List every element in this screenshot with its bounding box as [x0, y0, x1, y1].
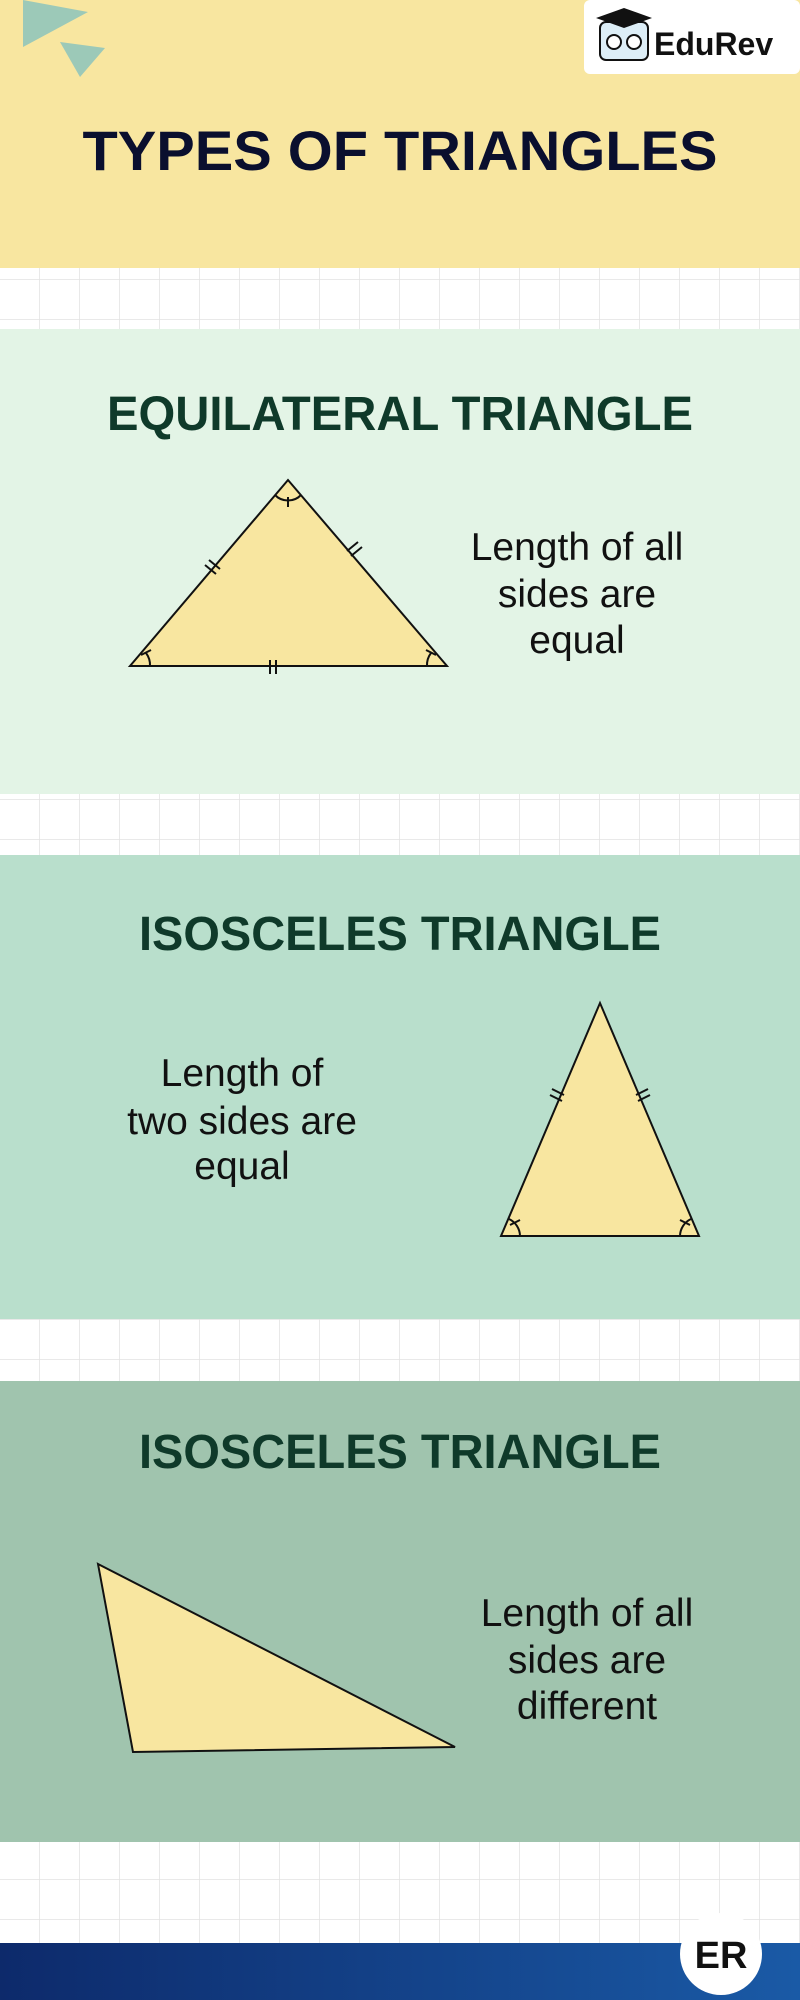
text: equilateral: sides are	[498, 573, 656, 616]
text: isosceles: Length of	[161, 1052, 323, 1095]
text: isosceles: two sides are	[127, 1100, 357, 1143]
panel: scalene	[0, 1381, 800, 1842]
text: equilateral: equal	[529, 619, 625, 662]
panel: equilateral	[0, 329, 800, 794]
triangle: equilateral	[130, 480, 447, 674]
title: TYPES OF TRIANGLES	[82, 119, 718, 182]
text: scalene: different	[517, 1685, 657, 1728]
heading: equilateral: EQUILATERAL TRIANGLE	[107, 388, 693, 441]
text: equilateral: Length of all	[471, 526, 683, 569]
triangle: isosceles	[501, 1003, 699, 1236]
text: scalene: Length of all	[481, 1592, 693, 1635]
logo: ER circle: ER	[695, 1935, 747, 1977]
triangle: scalene	[98, 1564, 455, 1752]
logo: EduRev	[584, 0, 800, 74]
footer band	[0, 1943, 800, 2000]
heading: scalene: ISOSCELES TRIANGLE	[139, 1426, 661, 1479]
text: isosceles: equal	[194, 1145, 290, 1188]
header band	[0, 0, 800, 268]
panel: isosceles	[0, 855, 800, 1319]
logo: EduRev: EduRev	[654, 26, 773, 62]
decorative triangles	[23, 0, 105, 77]
text: scalene: sides are	[508, 1639, 666, 1682]
logo: ER circle	[680, 1913, 762, 1995]
heading: isosceles: ISOSCELES TRIANGLE	[139, 908, 661, 961]
